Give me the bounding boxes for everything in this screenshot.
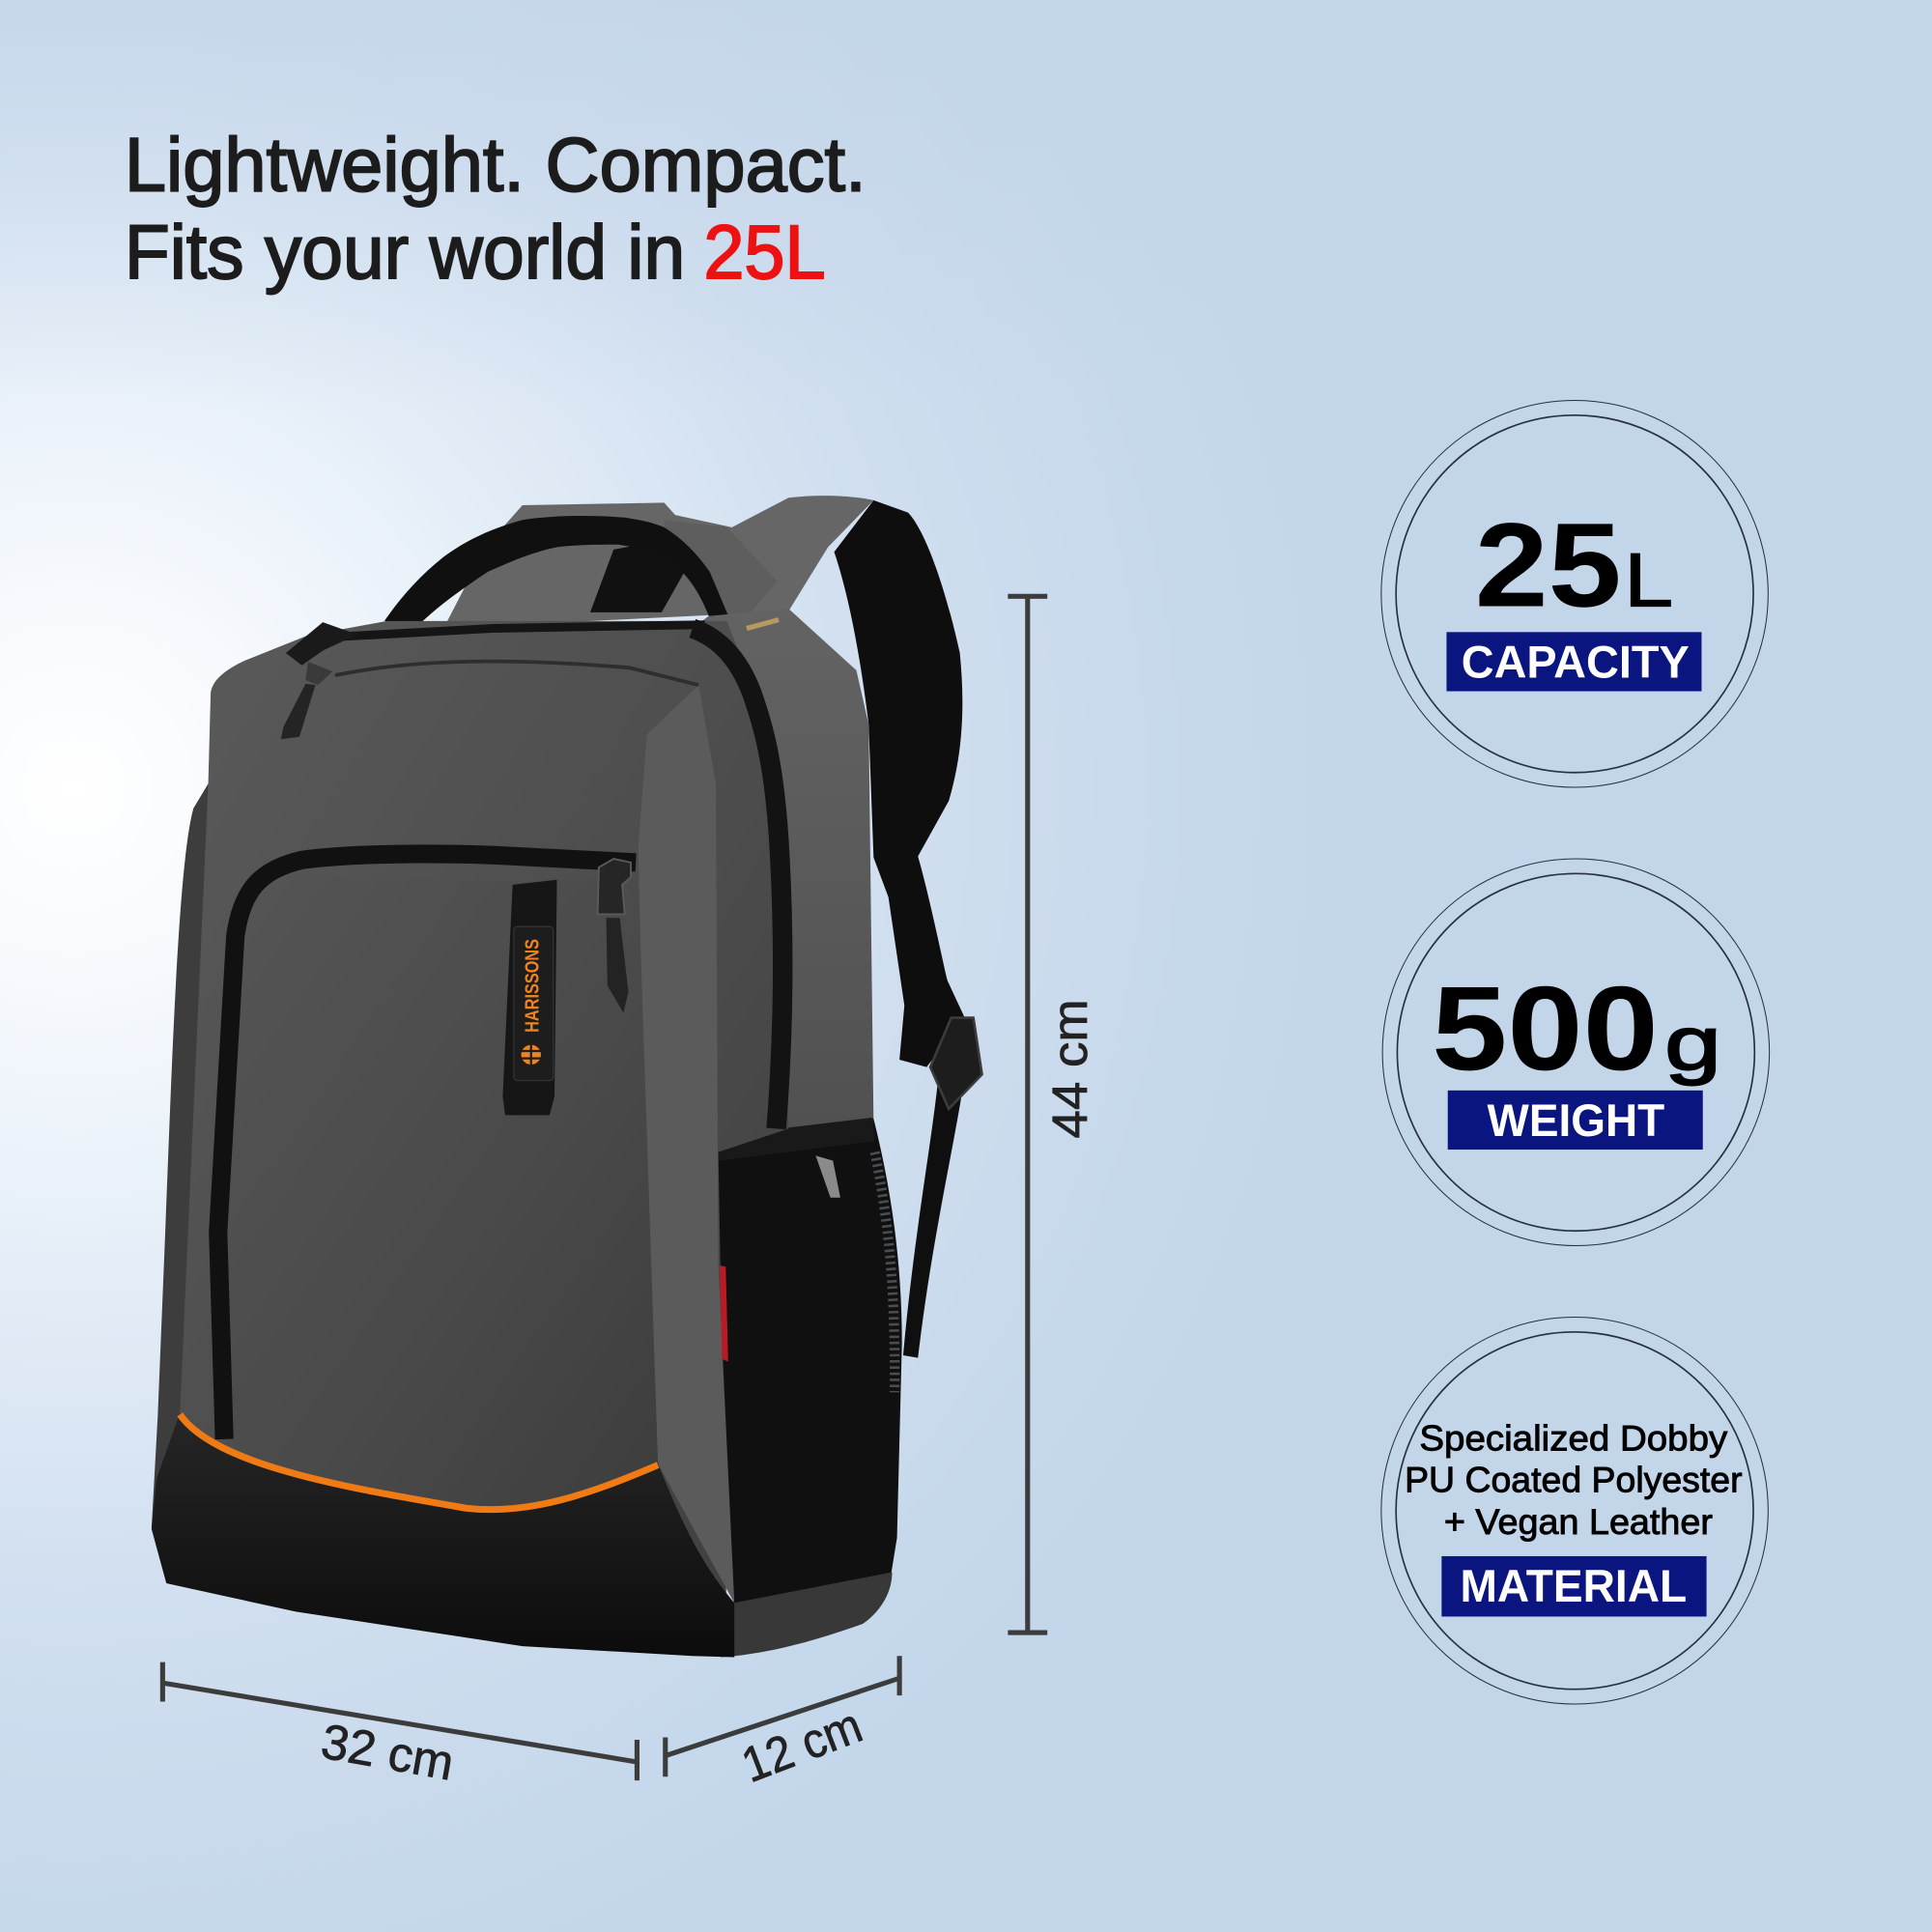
right side panel bbox=[702, 609, 873, 1152]
title: Lightweight. Compact. bbox=[125, 122, 867, 208]
rings bbox=[1381, 1318, 1768, 1704]
shoulder strap padding bbox=[835, 500, 965, 1067]
gold tab bbox=[747, 620, 779, 629]
mesh edge bbox=[875, 1152, 895, 1392]
rings bbox=[1381, 401, 1768, 787]
height dimension bbox=[1008, 596, 1097, 1633]
material text: + Vegan Leather bbox=[1444, 1502, 1713, 1542]
top zipper bbox=[332, 625, 705, 637]
brand label bbox=[514, 926, 554, 1081]
brand logo bbox=[522, 1045, 541, 1065]
side zipper bbox=[693, 629, 782, 1128]
front pocket face bbox=[224, 875, 658, 1511]
left side panel bbox=[152, 783, 234, 1552]
red side tag bbox=[720, 1265, 728, 1361]
material text: PU Coated Polyester bbox=[1405, 1461, 1743, 1500]
shoulder strap top bbox=[732, 496, 873, 611]
width dimension bbox=[162, 1662, 637, 1791]
base panel bbox=[152, 1413, 734, 1658]
badge: material bbox=[1381, 1318, 1768, 1704]
width line bbox=[162, 1662, 637, 1780]
label: WEIGHT bbox=[1488, 1095, 1664, 1147]
value: 25 bbox=[1475, 499, 1622, 633]
rings bbox=[1382, 859, 1770, 1246]
title: 25L bbox=[703, 209, 826, 295]
mesh pocket band bbox=[719, 1118, 875, 1161]
brand tab bbox=[502, 880, 557, 1115]
brand name: HARISSONS bbox=[522, 939, 543, 1033]
front zipper pull bbox=[598, 859, 631, 1012]
strap buckle bbox=[930, 1018, 982, 1109]
width label: 32 cm bbox=[317, 1714, 458, 1791]
upper seam bbox=[335, 662, 698, 685]
value: 500 bbox=[1432, 962, 1659, 1095]
label: CAPACITY bbox=[1462, 638, 1690, 689]
badge: weight bbox=[1382, 859, 1770, 1246]
rear handle strap bbox=[590, 542, 684, 612]
title: Fits your world in bbox=[125, 209, 685, 295]
pocket bottle cord bbox=[815, 1155, 840, 1198]
top zipper pull bbox=[281, 622, 357, 739]
banner bbox=[1448, 1091, 1703, 1150]
title bbox=[125, 122, 867, 295]
banner bbox=[1441, 1556, 1707, 1616]
unit: g bbox=[1664, 1000, 1721, 1086]
top handle gray side bbox=[665, 520, 778, 621]
material text: Specialized Dobby bbox=[1419, 1418, 1728, 1458]
material text bbox=[1405, 1418, 1743, 1542]
top handle black arc bbox=[384, 516, 729, 623]
lower shoulder strap bbox=[903, 1060, 967, 1358]
height label: 44 cm bbox=[1042, 999, 1097, 1139]
orange piping bbox=[180, 1414, 658, 1510]
depth line bbox=[666, 1656, 899, 1776]
side base bbox=[721, 1573, 892, 1658]
label: MATERIAL bbox=[1460, 1561, 1687, 1612]
banner bbox=[1446, 632, 1701, 692]
badge: capacity bbox=[1381, 401, 1768, 787]
unit: L bbox=[1624, 537, 1673, 623]
depth label: 12 cm bbox=[734, 1697, 869, 1793]
height line bbox=[1008, 596, 1047, 1633]
mesh pocket bbox=[702, 1119, 902, 1614]
front pocket zipper bbox=[218, 854, 636, 1439]
back panel top bbox=[443, 502, 788, 629]
backpack illustration bbox=[152, 496, 982, 1658]
depth dimension bbox=[666, 1656, 899, 1793]
front body bbox=[180, 621, 788, 1634]
side front strip bbox=[639, 685, 734, 1603]
